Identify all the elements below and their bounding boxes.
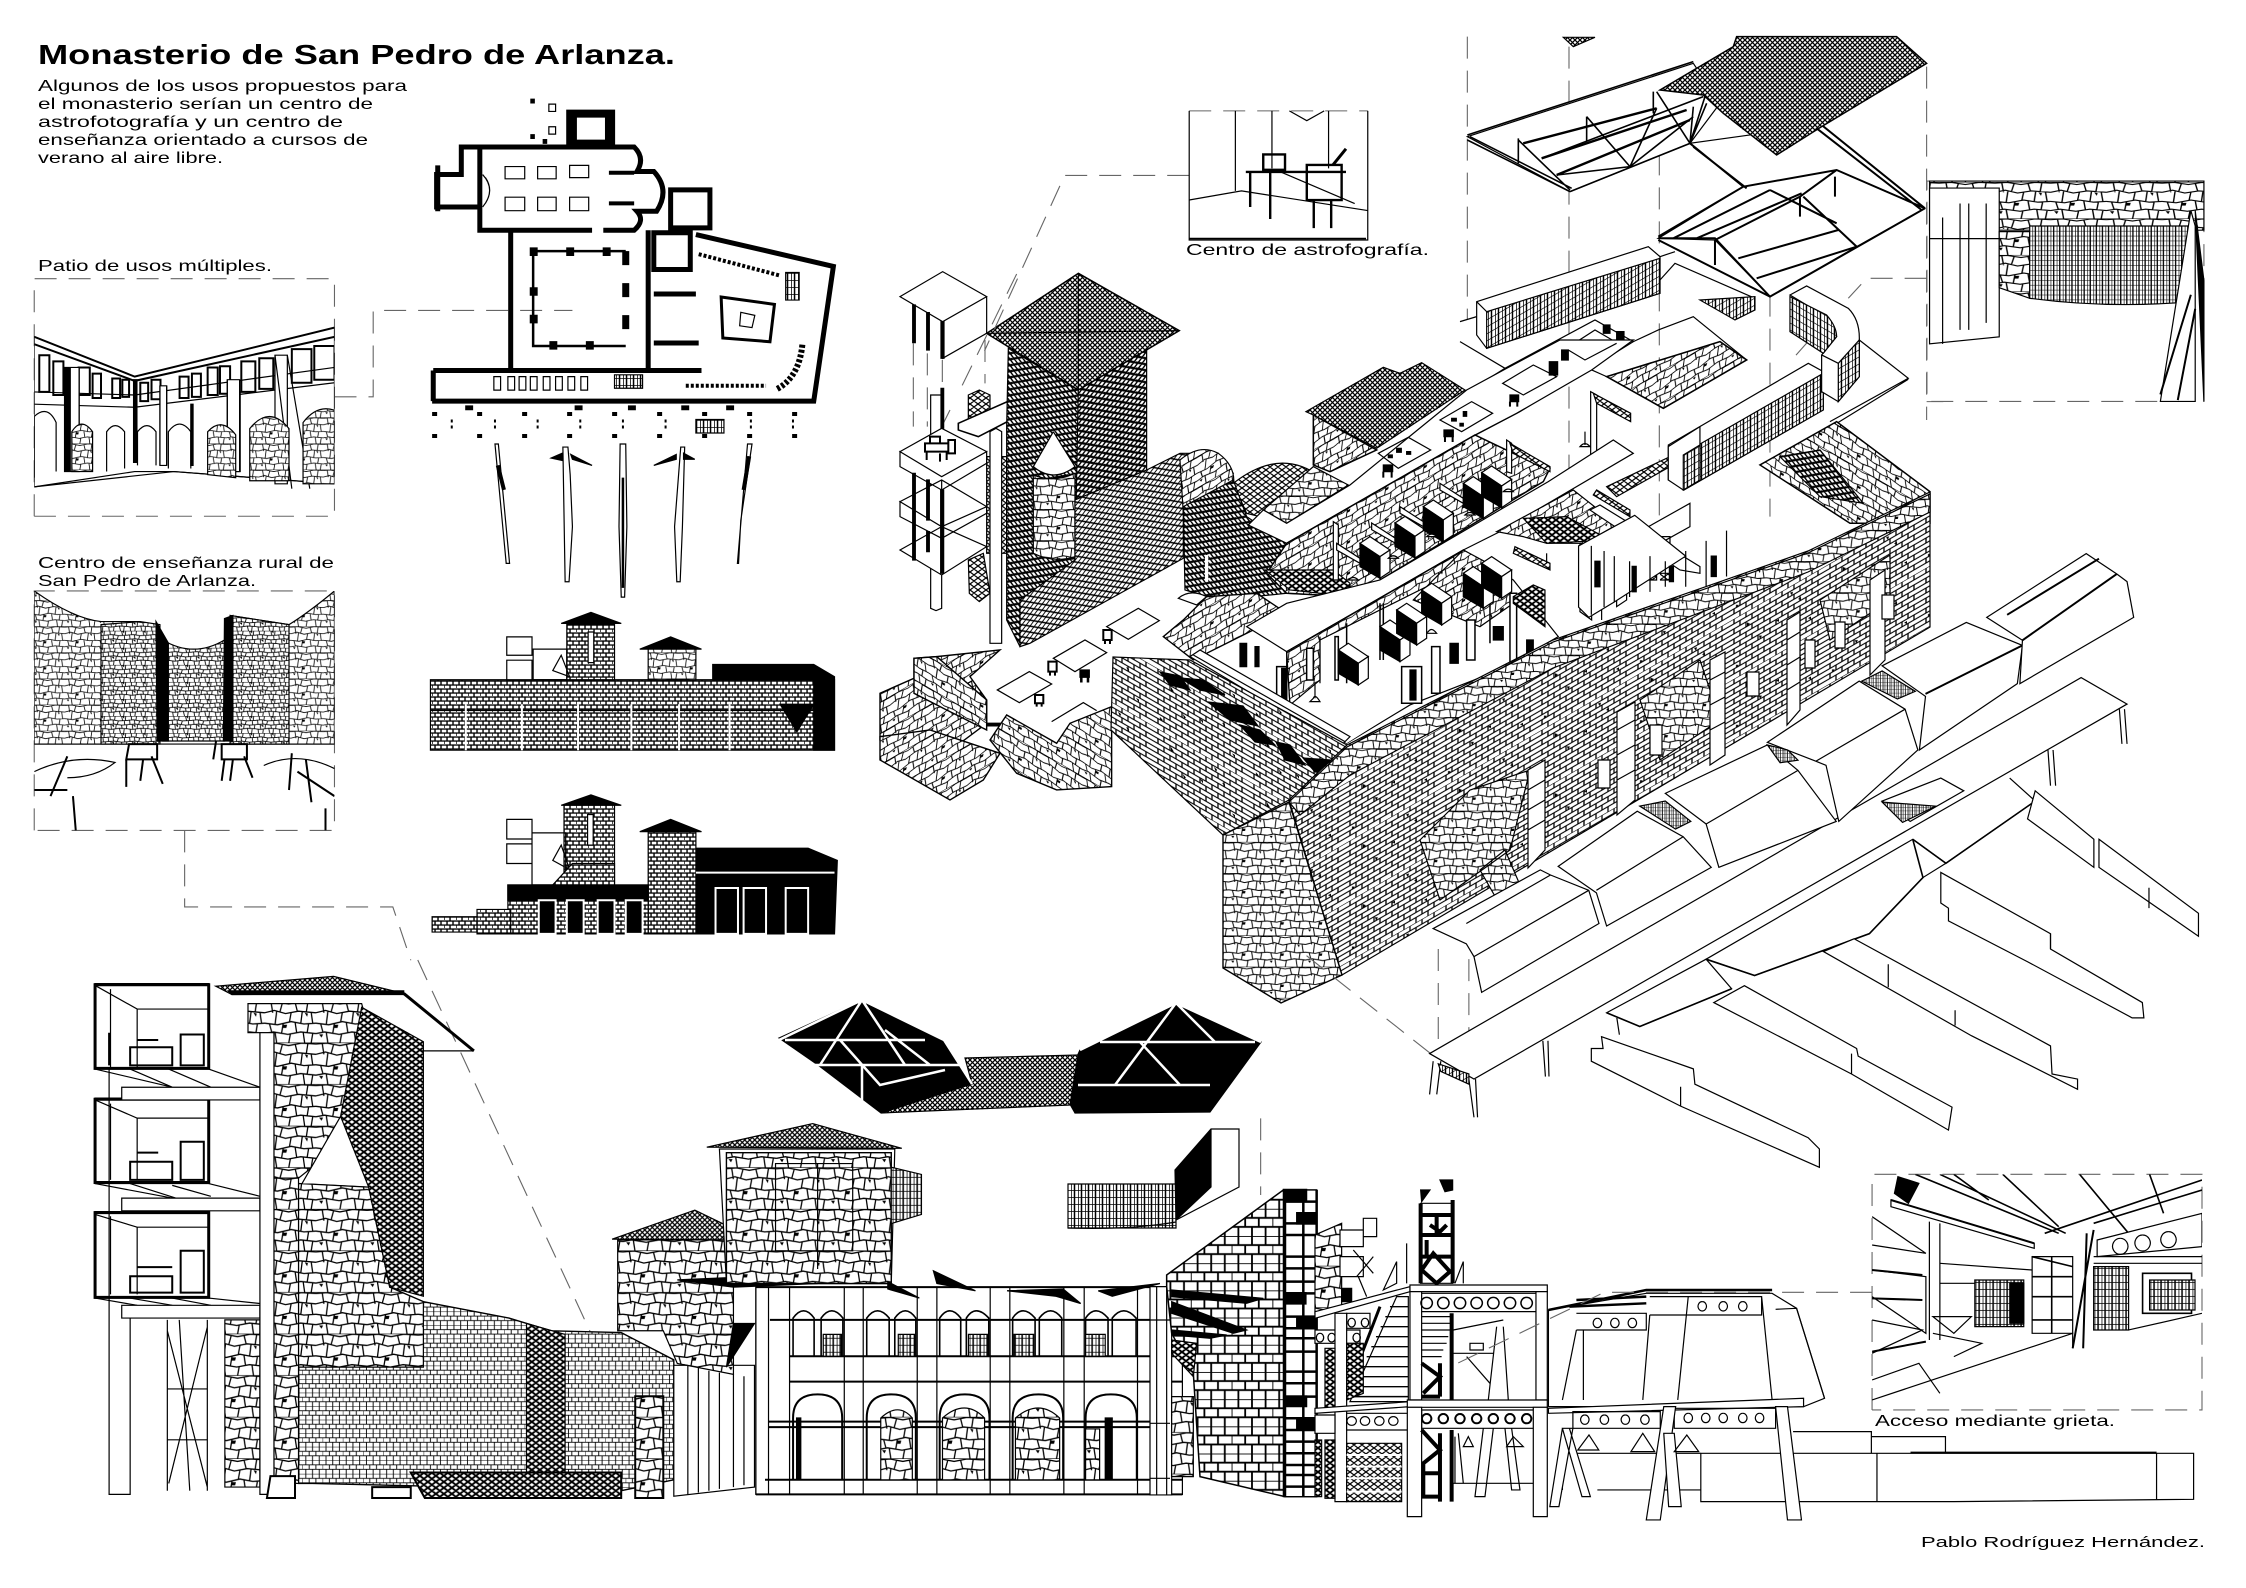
curved screen wall: [1790, 286, 1908, 432]
terrace and tables: [1460, 320, 1633, 443]
tables on the terrace: [997, 608, 1159, 722]
label: centro de enseñanza: San Pedro de Arlanza.: [38, 573, 256, 590]
end slab of facade: [1150, 1287, 1172, 1495]
tower body: [987, 273, 1179, 647]
perspective: acceso: [1872, 1174, 2202, 1410]
dashed guides: [913, 274, 1017, 473]
house with tile roof: [1306, 363, 1465, 472]
cross wall: [1111, 657, 1347, 835]
cloister facade: [756, 1271, 1182, 1494]
frame 1: [1407, 1285, 1547, 1517]
guide: [1260, 1118, 1262, 1195]
base tables: [267, 1396, 663, 1498]
roof 2: [1658, 125, 1925, 297]
roof 1: [1467, 37, 1927, 192]
crack tower: [1421, 1180, 1463, 1283]
upper stone band: [1267, 435, 1550, 597]
elevation 1: [430, 612, 835, 750]
label: astrofotografia: Centro de astrofografía.: [1186, 242, 1429, 259]
axonometric: cloister interior: [1190, 340, 1700, 747]
table: [1430, 678, 2127, 1117]
upper slab: [1248, 340, 1633, 543]
perspective: astrofotografia: [985, 111, 2204, 401]
suspended screen: [1068, 1129, 1239, 1228]
intro text block: enseñanza orientado a cursos de: [38, 132, 368, 149]
stone walls low: [225, 1004, 674, 1491]
plinth blocks: [1562, 1432, 2194, 1502]
wall from tower to arch: [1020, 453, 1233, 647]
stairs: [1700, 297, 1755, 320]
roof segments: [1433, 554, 2134, 992]
label: centro de enseñanza: [38, 555, 334, 590]
bookcases row 2: [1338, 557, 1512, 685]
door frame: [1580, 392, 1631, 457]
perspective: library wall: [1927, 181, 2204, 401]
intro text block: Algunos de los usos propuestos para: [38, 78, 407, 95]
label: acceso: Acceso mediante grieta.: [1875, 1413, 2115, 1430]
scaffold rooms: [95, 984, 274, 1494]
long wall front: [1289, 492, 1930, 975]
bottom section, roof trusses: [779, 1000, 1261, 1228]
dashed connector: [1451, 1292, 1872, 1367]
author credit: Pablo Rodríguez Hernández.: [1921, 1534, 2205, 1551]
bottom section, right: [1451, 1174, 2202, 1520]
colonnade row 2: [1240, 550, 1558, 743]
axonometric: roofs, screens, platform: [1460, 37, 1943, 523]
label: patio: Patio de usos múltiples.: [38, 258, 272, 275]
floor plan: [432, 99, 833, 436]
ruin behind frames: [1315, 1218, 1407, 1313]
bookcases row 1: [1337, 466, 1513, 580]
stone block: [1513, 585, 1545, 627]
vertical slats: [674, 1365, 754, 1496]
intro text block: [38, 78, 407, 167]
white cornice along cross wall: [1190, 650, 1350, 747]
big tower: [707, 1124, 921, 1284]
dashed guides: [1298, 949, 1469, 1054]
slab and stairs: [1315, 1287, 1410, 1402]
left column drawings: [34, 99, 837, 960]
axonometric: tower, scaffold and ruins: [880, 272, 1350, 800]
courtyard east range: [1579, 515, 1727, 617]
stone wall: [1167, 1189, 1317, 1497]
screen wall 1: [1460, 247, 1755, 368]
perspective: centro de ensenanza: [34, 591, 411, 960]
elevation 2: [432, 795, 837, 934]
arch over opening: [1497, 490, 1620, 570]
domes: [1178, 450, 1350, 605]
screen wall 2: [1668, 363, 1823, 490]
ruin walls: [880, 650, 1112, 800]
frame 0 and bookcase: [1315, 1313, 1410, 1502]
lower white band: [1247, 440, 1633, 652]
perspective: patio: [34, 279, 572, 516]
beams: [1591, 791, 2198, 1167]
back stone wall: [1760, 422, 1930, 523]
label: centro de enseñanza: Centro de enseñanza rural de: [38, 555, 334, 572]
intro text block: el monasterio serían un centro de: [38, 96, 373, 113]
top fragment: [1563, 37, 1595, 47]
house left view: [1163, 593, 1287, 660]
small tower: [612, 1210, 818, 1374]
long wall end: [1223, 802, 1342, 1003]
lower roof panels: [1607, 778, 2035, 1027]
frames 2 and 3: [1548, 1290, 1825, 1520]
axonometric: cross wall and long wall: [1111, 492, 1930, 1003]
blades under plan: [495, 444, 752, 597]
dashed guide: [418, 960, 593, 1338]
intro text block: astrofotografía y un centro de: [38, 114, 343, 131]
scaffold tower: [900, 272, 1030, 611]
stone courtyard: [1607, 342, 1747, 408]
frame at top of band: [1333, 440, 1550, 580]
intro text block: verano al aire libre.: [38, 150, 223, 167]
tower roof: [216, 976, 474, 1051]
bottom section, stone wall and first frames: [1150, 1118, 1547, 1517]
dashed guides: [1467, 37, 1943, 520]
bottom section, left: [95, 960, 1182, 1498]
axonometric: market roofs, table and beams: [1298, 515, 2198, 1167]
opening with stairs: [1882, 778, 1964, 822]
title: Monasterio de San Pedro de Arlanza.: [38, 39, 675, 70]
east arcade: [1580, 427, 1700, 620]
dome diamond: [1263, 467, 1348, 523]
